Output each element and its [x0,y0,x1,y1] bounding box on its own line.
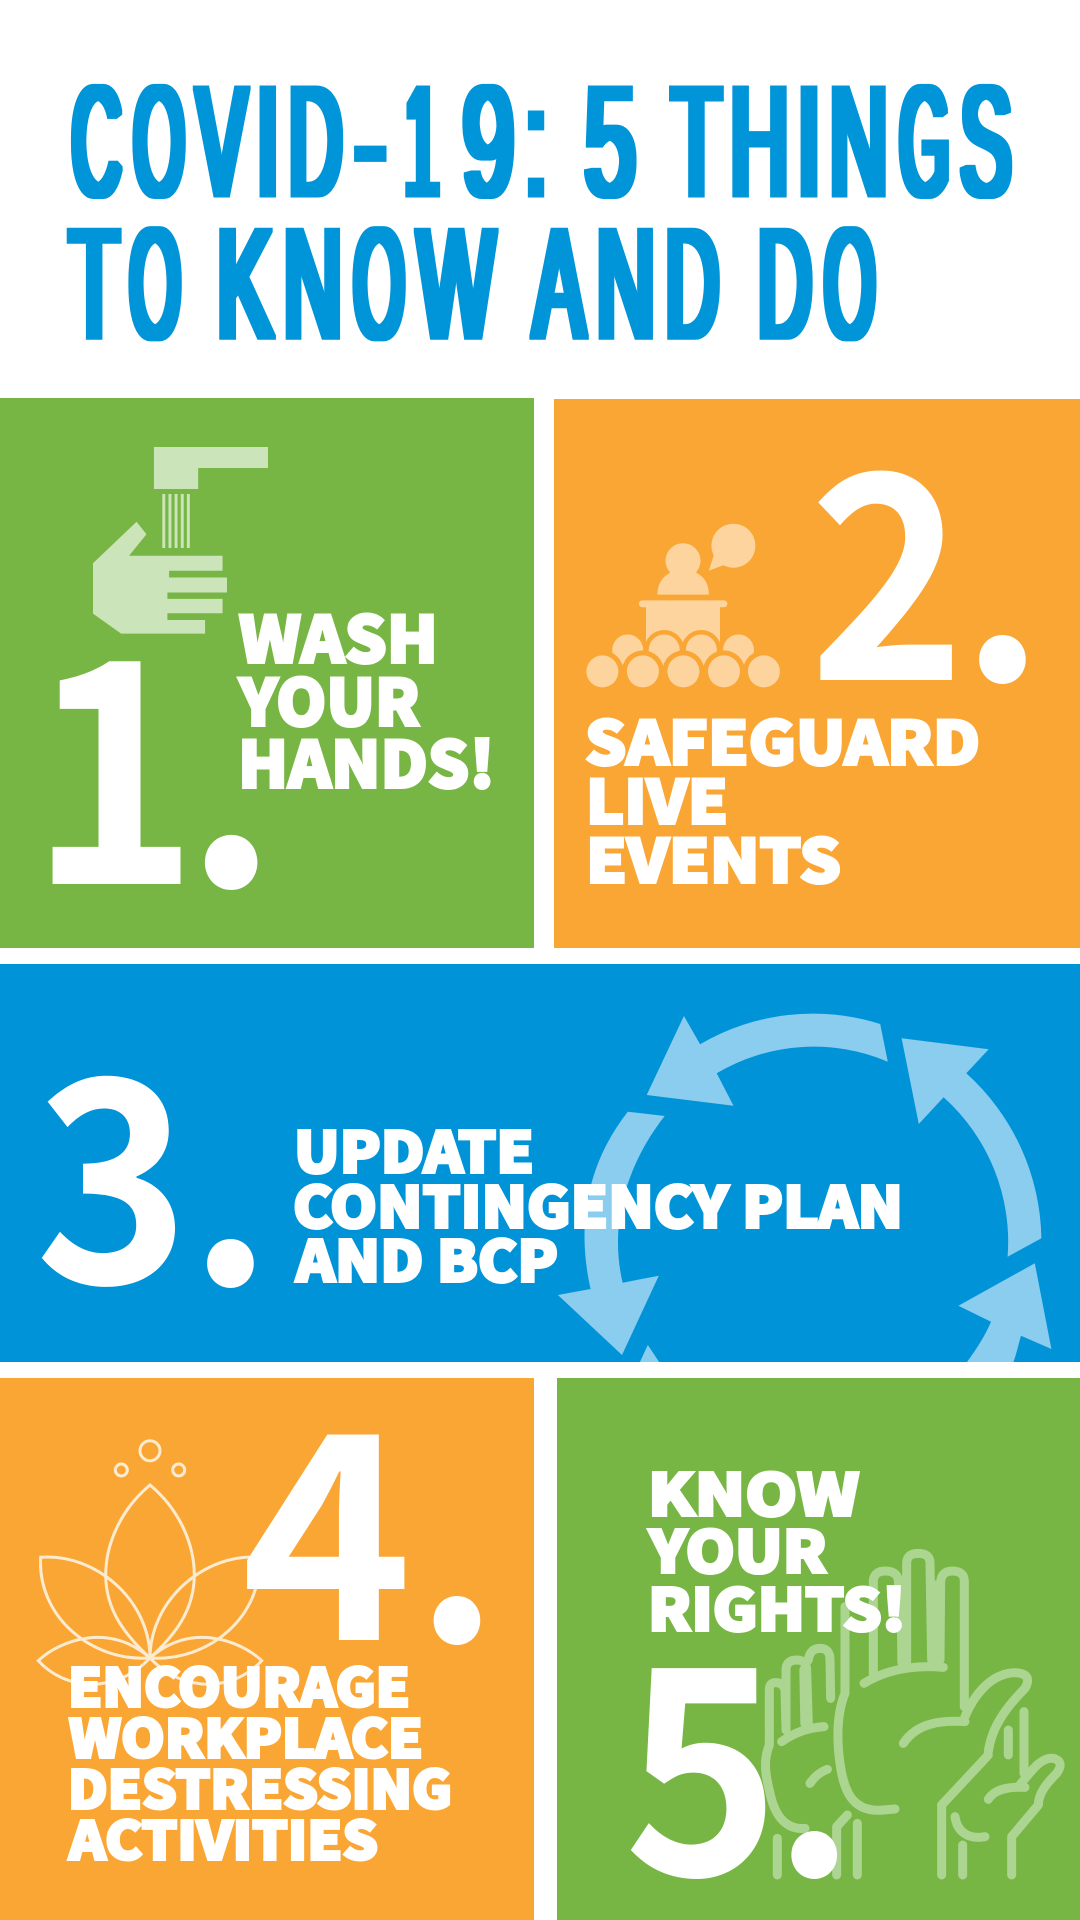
number 2: . [961,385,1044,754]
icon: tap and washing hand [93,447,268,634]
heading: encourage workplace destressing activities [68,1646,452,1876]
heading: wash your hands: WASH [239,590,438,682]
heading: wash your hands: HANDS! [238,714,495,806]
title: N [596,197,655,372]
heading: update contingency plan and bcp: CONTINGENCY PLAN [293,1162,903,1244]
title: O [824,197,875,372]
panel: encourage destressing [0,1309,534,1920]
heading: safeguard live events [585,696,980,900]
heading: safeguard live events: SAFEGUARD [585,696,980,782]
number 4 [241,1309,498,1722]
heading: know your rights: YOUR [648,1506,827,1590]
title: O [134,54,184,230]
title: K [217,197,273,372]
title: I [257,54,279,230]
title: D [289,54,342,230]
heading: safeguard live events: LIVE [586,754,728,842]
title [69,54,1011,372]
heading: encourage workplace destressing activities: ENCOURAGE [68,1646,410,1722]
title: D [758,197,812,372]
text: S [961,54,1011,230]
title: N [830,54,888,230]
panel: wash your hands [0,398,534,973]
heading: encourage workplace destressing activities: DESTRESSING [68,1748,452,1824]
number 2 [809,351,1044,763]
icon: lotus flower [38,1441,262,1684]
number 1: . [184,553,278,969]
title: 9 [462,54,514,230]
heading: update contingency plan and bcp: UPDATE [294,1108,534,1190]
title: A [534,197,585,372]
title: O [354,197,404,372]
number 4: 4 [241,1309,413,1722]
heading: know your rights: RIGHTS! [648,1564,906,1648]
number 1: 1 [29,526,199,973]
icon: circular arrows [558,1014,1051,1366]
heading: know your rights: KNOW [648,1448,859,1532]
number 1 [29,526,278,973]
heading: wash your hands [238,590,495,806]
panel: update contingency plan [0,957,1080,1366]
title: W [418,197,494,372]
heading: encourage workplace destressing activities: ACTIVITIES [68,1800,378,1876]
title: - [354,54,386,230]
title: : [525,54,547,230]
heading: update contingency plan and bcp: AND BCP [295,1216,558,1298]
heading: know your rights [648,1448,906,1648]
icon: speaker at lectern with audience [581,524,785,692]
number 3 [35,957,272,1365]
title: O [130,197,180,372]
icon: raised hands [765,1553,1060,1875]
number 3: 3 [35,957,190,1365]
title: C [72,54,121,230]
title: V [197,54,247,230]
number 2: 2 [809,351,965,763]
number 3: . [189,989,272,1358]
title: H [730,54,789,230]
heading: safeguard live events: EVENTS [586,814,841,900]
number 5 [624,1543,855,1920]
title: 5 [585,54,636,230]
heading: wash your hands: YOUR [238,652,420,744]
panel: know your rights [557,1378,1080,1920]
panel: safeguard live events [554,351,1080,948]
title: 1 [405,54,439,230]
title: D [666,197,719,372]
title: I [797,54,821,230]
heading: update contingency plan and bcp [293,1108,903,1298]
title: G [900,54,949,230]
title: T [69,197,119,372]
number 4: . [416,1346,498,1715]
heading: encourage workplace destressing activities: WORKPLACE [69,1698,423,1774]
title: N [284,197,342,372]
title: T [672,54,721,230]
